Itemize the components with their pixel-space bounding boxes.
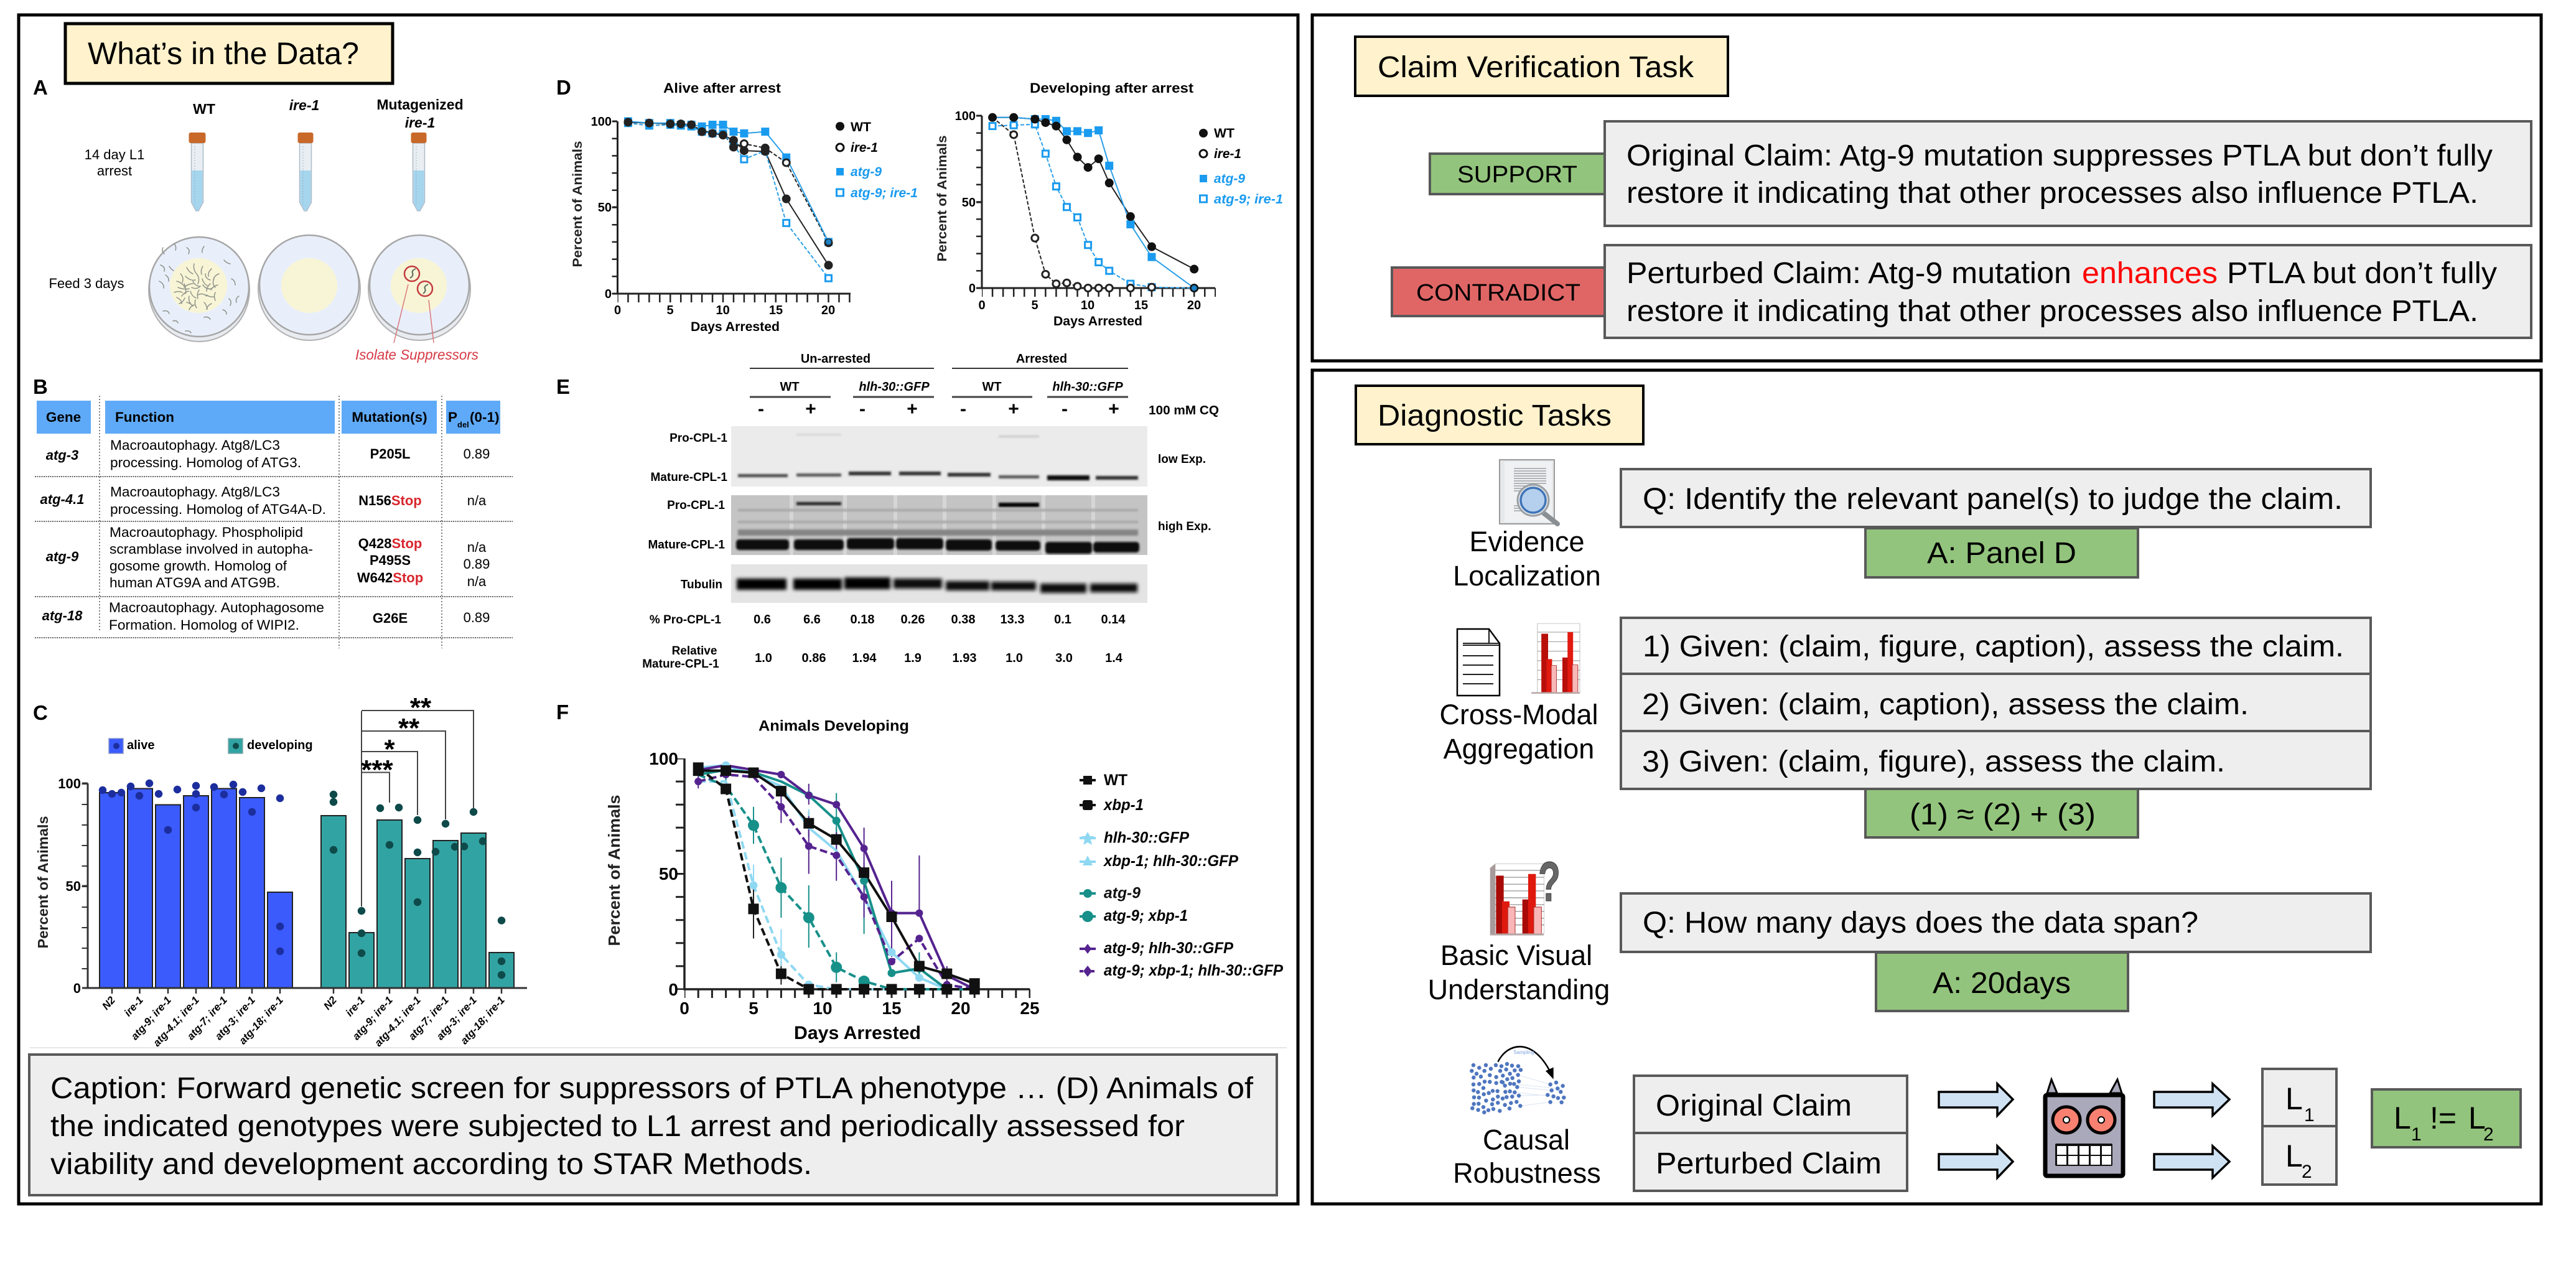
blot: tubulin (731, 564, 1147, 603)
blot labels: high Exp. (1158, 520, 1211, 533)
label boxes L1 L2: L (2285, 1139, 2303, 1173)
table rows (40, 437, 490, 633)
perturbed claim box: Perturbed Claim: Atg-9 mutation (1626, 257, 2071, 290)
answer: 20days: A: 20days (1933, 967, 2071, 1000)
axis labels: 5 (749, 999, 758, 1018)
panel B: gene table: B (33, 375, 48, 398)
blot labels: % Pro-CPL-1 (650, 613, 721, 627)
blot header: WT (780, 380, 800, 394)
claim pair boxes (1634, 1076, 1907, 1191)
icon: plate mutagenized with suppressors: Isolate Suppressors (355, 347, 478, 363)
panel E: western blot (556, 352, 1219, 671)
caption box: Caption: Forward genetic screen for suppressors of PTLA phenotype … (D) Animals of (50, 1072, 1254, 1105)
table rows: Macroautophagy. Atg8/LC3 (110, 437, 280, 453)
table rows: P495S (370, 552, 411, 568)
category labels: ire-1 (343, 994, 367, 1018)
blot values: 0.6 (754, 613, 771, 627)
blot values: 1.93 (953, 651, 976, 665)
panel A: screen schematic: Mutagenized (376, 96, 464, 113)
caption box (29, 1055, 1277, 1195)
significance brackets: ** (398, 713, 420, 743)
axis labels: 100 (649, 749, 678, 768)
list: three given prompts: 1) Given: (claim, figure, caption), assess the claim. (1643, 630, 2344, 663)
chart: alive after arrest: Days Arrested (691, 320, 780, 334)
panel C: bar chart: Percent of Animals (35, 816, 51, 948)
blot values: 13.3 (1001, 613, 1024, 627)
original claim box (1605, 121, 2531, 226)
chart: alive after arrest: 20 (821, 304, 835, 317)
table rows: Macroautophagy. Phospholipid (110, 524, 303, 540)
axes (82, 783, 527, 994)
label: CONTRADICT (1392, 268, 1605, 316)
table rows: Q428Stop (358, 536, 422, 551)
chart: alive after arrest: 5 (666, 304, 674, 317)
blot values: 0.18 (851, 613, 874, 627)
icon: plate ire-1 (258, 235, 360, 340)
icon: sampled graph (1472, 1046, 1564, 1112)
list: three given prompts (1621, 618, 2371, 789)
answer: equation (1865, 789, 2138, 837)
blot labels: Mature-CPL-1 (650, 471, 727, 484)
perturbed claim box: enhances (2082, 257, 2218, 290)
axis labels (649, 749, 1040, 1018)
caption box: viability and development according to STAR Methods. (50, 1148, 812, 1181)
error bars (698, 763, 947, 985)
blot labels: low Exp. (1158, 453, 1206, 466)
category labels: atg-3; ire-1 (434, 994, 479, 1042)
legend: WT (851, 120, 871, 134)
category labels: N2 (321, 994, 339, 1012)
icon: robot (2045, 1079, 2123, 1176)
blot values: 1.4 (1105, 651, 1123, 665)
panel C: bar chart: 50 (66, 879, 81, 894)
table rows: n/a (467, 574, 487, 589)
series lines (698, 765, 974, 989)
task: basic visual understanding (1428, 851, 1610, 1005)
axis labels: 10 (813, 999, 833, 1018)
blot header: hlh-30::GFP (859, 380, 930, 394)
chart: developing after arrest: Days Arrested (1053, 314, 1142, 329)
panel F: animals developing line chart: Animals Developing (758, 718, 909, 734)
claim pair boxes: Original Claim (1656, 1089, 1852, 1122)
legend (836, 120, 918, 200)
table rows: human ATG9A and ATG9B. (110, 575, 280, 590)
arrow: original to model (1939, 1084, 2013, 1116)
chart: developing after arrest: 0 (969, 282, 976, 296)
heading: Diagnostic Tasks (1356, 386, 1643, 444)
question: identify relevant panels: Q: Identify the relevant panel(s) to judge the claim. (1643, 483, 2343, 516)
chart: developing after arrest: 100 (955, 110, 976, 123)
blot header: + (1108, 399, 1119, 419)
panel: claim verification task (1312, 15, 2541, 361)
panel F: animals developing line chart: Percent of Animals (605, 795, 623, 946)
table rows: Macroautophagy. Atg8/LC3 (110, 484, 280, 500)
icon: sampled graph: Sampling (1513, 1050, 1534, 1055)
axis labels: 0 (679, 999, 689, 1018)
task: evidence localization (1453, 460, 1601, 592)
category labels: ire-1 (122, 994, 146, 1018)
table rows: P205L (370, 446, 410, 462)
table header: Function (115, 409, 174, 425)
arrow: model to L1 (2154, 1084, 2229, 1116)
legend (1080, 771, 1283, 979)
task: basic visual understanding: Basic Visual (1440, 939, 1592, 971)
table header: P (448, 409, 457, 425)
blot labels: Relative (672, 645, 717, 658)
blot values: 0.86 (802, 651, 826, 665)
blot labels: Pro-CPL-1 (670, 432, 727, 445)
table rows: n/a (467, 539, 487, 555)
legend: developing (247, 739, 313, 752)
panel A: screen schematic: ire-1 (289, 97, 319, 113)
question: days span (1621, 893, 2371, 952)
chart: developing after arrest: 10 (1081, 299, 1094, 312)
table header (37, 401, 500, 434)
legend: xbp-1 (1103, 796, 1144, 814)
blot: high exposure (731, 495, 1147, 555)
blot header: - (758, 399, 764, 419)
icon: document (1457, 629, 1500, 696)
blot header: + (805, 399, 816, 419)
chart: developing after arrest: 5 (1031, 299, 1038, 312)
result: L1 != L2 (2372, 1089, 2521, 1147)
panel A: screen schematic: Feed 3 days (49, 276, 124, 291)
blot values: 0.14 (1101, 613, 1126, 627)
original claim box: Original Claim: Atg-9 mutation suppresses PTLA but don’t fully (1626, 139, 2493, 172)
significance brackets (361, 692, 474, 906)
question: days span: Q: How many days does the data span? (1643, 906, 2198, 939)
significance brackets: * (384, 734, 395, 765)
heading: Claim Verification Task: Claim Verification Task (1378, 51, 1694, 84)
chart: alive after arrest: Percent of Animals (571, 141, 585, 268)
axis labels: 50 (659, 864, 678, 883)
blot labels: Mature-CPL-1 (642, 658, 719, 671)
axis labels: 0 (668, 980, 678, 999)
legend: atg-9 (1104, 885, 1141, 902)
blot: low exposure (731, 426, 1147, 487)
blot values: 3.0 (1055, 651, 1073, 665)
table rows: N156Stop (358, 493, 422, 508)
panel A: screen schematic: 14 day L1 (85, 147, 144, 162)
blot values: 0.38 (951, 613, 975, 627)
panel A: screen schematic: ire-1 (405, 114, 435, 131)
panel F: animals developing line chart: F (556, 701, 569, 724)
legend: WT (1104, 771, 1127, 789)
category labels: atg-18; ire-1 (458, 994, 507, 1046)
icon: tube ire-1 (297, 133, 314, 211)
panel A: screen schematic: WT (193, 101, 215, 117)
legend (1199, 126, 1283, 207)
heading: What's in the Data? (65, 24, 393, 83)
table rows: scramblase involved in autopha- (110, 541, 313, 557)
list: three given prompts: 3) Given: (claim, figure), assess the claim. (1642, 745, 2225, 778)
blot header: 100 mM CQ (1149, 404, 1219, 417)
chart: developing after arrest (935, 80, 1283, 329)
arrow: model to L2 (2154, 1146, 2229, 1178)
task: basic visual understanding: Understanding (1428, 974, 1610, 1005)
task: evidence localization: Localization (1453, 560, 1601, 592)
icon: red bar chart (1531, 623, 1580, 694)
legend: alive (127, 739, 154, 752)
answer: equation: (1) ≈ (2) + (3) (1910, 798, 2096, 831)
result: L1 != L2: L (2394, 1101, 2411, 1135)
chart: developing after arrest: 15 (1134, 299, 1148, 312)
legend: ire-1 (1214, 147, 1241, 161)
icon: plate mutagenized with suppressors (355, 235, 478, 363)
chart: alive after arrest: Alive after arrest (663, 80, 782, 96)
icon: bar chart with question mark (1490, 864, 1544, 935)
blot labels (642, 432, 1211, 671)
category labels: atg-3; ire-1 (213, 994, 258, 1042)
blot header: + (907, 399, 918, 419)
panel: diagnostic tasks (1312, 370, 2541, 1204)
chart: developing after arrest: Percent of Animals (935, 136, 950, 261)
task: evidence localization: Evidence (1469, 526, 1585, 557)
table rows: n/a (467, 493, 487, 508)
category labels: atg-4.1; ire-1 (372, 994, 423, 1049)
task: causal robustness (1453, 1046, 1601, 1189)
category labels: atg-4.1; ire-1 (151, 994, 202, 1049)
icon: question mark: ? (1538, 851, 1561, 913)
panel C: bar chart (33, 692, 527, 1049)
blot values: 1.0 (1006, 651, 1023, 665)
result: L1 != L2: 2 (2483, 1124, 2494, 1145)
perturbed claim box: restore it indicating that other processes also influence PTLA. (1626, 295, 2478, 328)
category labels: atg-7; ire-1 (406, 994, 451, 1042)
blot values: 1.0 (755, 651, 772, 665)
axis labels: 25 (1020, 999, 1040, 1018)
panel B: gene table (33, 375, 513, 648)
panel C: bar chart: C (33, 701, 48, 724)
blot header: hlh-30::GFP (1052, 380, 1123, 394)
significance brackets: *** (361, 755, 394, 785)
blot header: - (1062, 399, 1068, 419)
table header: (0-1) (470, 409, 500, 425)
claim pair boxes: Perturbed Claim (1656, 1147, 1882, 1180)
category labels: atg-18; ire-1 (236, 994, 286, 1046)
label boxes L1 L2: 2 (2302, 1162, 2312, 1182)
table rows: atg-9 (46, 549, 79, 564)
legend: atg-9; ire-1 (851, 186, 918, 200)
panel E: western blot: E (556, 375, 570, 398)
chart: alive after arrest: 15 (769, 304, 783, 317)
label boxes L1 L2 (2262, 1069, 2336, 1185)
legend: atg-9; xbp-1 (1104, 907, 1188, 925)
table rows: Formation. Homolog of WIPI2. (109, 617, 299, 633)
category labels: atg-9; ire-1 (129, 994, 174, 1042)
category labels (100, 994, 507, 1049)
table rows: atg-4.1 (40, 492, 84, 507)
category labels: N2 (100, 994, 118, 1012)
panel A: screen schematic: arrest (97, 163, 132, 179)
table header: Gene (46, 409, 81, 425)
chart: developing after arrest: Developing after arrest (1030, 80, 1194, 96)
heading: Diagnostic Tasks: Diagnostic Tasks (1378, 399, 1612, 432)
table rows: 0.89 (464, 610, 490, 625)
perturbed claim box (1605, 245, 2531, 338)
heading: Claim Verification Task (1355, 37, 1728, 96)
label: SUPPORT (1430, 154, 1605, 194)
legend: WT (1214, 126, 1234, 141)
icon: plate WT with worms (149, 237, 250, 342)
table rows: gosome growth. Homolog of (110, 558, 287, 574)
chart: alive after arrest (571, 80, 918, 334)
panel D: survival line charts (556, 76, 1283, 334)
legend: atg-9 (851, 165, 882, 179)
chart: alive after arrest: 100 (591, 115, 612, 129)
blot header: - (960, 399, 966, 419)
chart: alive after arrest: 0 (614, 304, 621, 317)
task: causal robustness: Robustness (1453, 1157, 1601, 1189)
result: L1 != L2: 1 (2411, 1124, 2422, 1145)
panel D: survival line charts: D (556, 76, 571, 99)
heading: What's in the Data?: What’s in the Data? (88, 36, 359, 71)
axis labels: 15 (882, 999, 902, 1018)
legend: atg-9; hlh-30::GFP (1104, 939, 1233, 957)
legend: atg-9; xbp-1; hlh-30::GFP (1104, 962, 1283, 979)
blot header: - (859, 399, 866, 419)
blot header: Un-arrested (801, 352, 870, 366)
chart: alive after arrest: 0 (605, 287, 612, 301)
blot values: 1.94 (852, 651, 877, 665)
blot labels: Tubulin (681, 579, 722, 591)
result: L1 != L2: L (2468, 1101, 2486, 1135)
blot header (750, 352, 1219, 419)
blot header: Arrested (1016, 352, 1067, 366)
perturbed claim box: PTLA but don’t fully (2227, 257, 2497, 290)
question: identify relevant panels (1621, 469, 2371, 527)
legend: xbp-1; hlh-30::GFP (1103, 852, 1238, 870)
table rows: 0.89 (464, 556, 490, 572)
blot header: WT (982, 380, 1002, 394)
panel C: bar chart: 100 (58, 776, 81, 791)
legend: atg-9 (1214, 172, 1245, 186)
blot labels: Mature-CPL-1 (648, 539, 725, 551)
blot values: 1.9 (904, 651, 922, 665)
task: cross-modal aggregation: Aggregation (1444, 733, 1594, 765)
legend: ire-1 (851, 141, 878, 155)
task: cross-modal aggregation (1439, 623, 1598, 765)
table rows: atg-3 (46, 447, 78, 463)
legend: hlh-30::GFP (1104, 829, 1189, 846)
icon: document with magnifier (1500, 460, 1557, 524)
panel A: screen schematic: A (33, 76, 48, 99)
table rows: Macroautophagy. Autophagosome (109, 600, 324, 615)
task: causal robustness: Causal (1483, 1124, 1570, 1156)
blot values: 6.6 (803, 613, 821, 627)
table rows: atg-18 (42, 608, 83, 623)
result: L1 != L2: != (2430, 1101, 2457, 1135)
label boxes L1 L2: 1 (2304, 1105, 2315, 1126)
original claim box: restore it indicating that other processes also influence PTLA. (1626, 177, 2478, 210)
category labels: atg-7; ire-1 (185, 994, 230, 1042)
axis labels: 20 (951, 999, 971, 1018)
answer: Panel D: A: Panel D (1927, 537, 2076, 570)
panel C: bar chart: 0 (73, 981, 81, 996)
table header: Mutation(s) (352, 409, 427, 425)
legend: atg-9; ire-1 (1214, 192, 1283, 207)
table rows: G26E (373, 610, 408, 626)
blot header: + (1008, 399, 1019, 419)
blot values: 0.26 (901, 613, 925, 627)
panel F: animals developing line chart (556, 701, 1283, 1043)
arrow: perturbed to model (1939, 1146, 2013, 1178)
blot values: 0.1 (1054, 613, 1071, 627)
answer: 20days (1876, 953, 2128, 1011)
table rows: processing. Homolog of ATG4A-D. (110, 501, 326, 517)
table rows: processing. Homolog of ATG3. (110, 455, 301, 470)
answer: Panel D (1865, 528, 2138, 577)
bars (100, 789, 514, 988)
icon: tube mutagenized (411, 133, 427, 211)
panel: what's in the data (19, 15, 1298, 1204)
chart: developing after arrest: 20 (1187, 299, 1201, 312)
blot labels: Pro-CPL-1 (667, 499, 725, 512)
legend (109, 739, 313, 753)
label: CONTRADICT: CONTRADICT (1416, 280, 1580, 306)
chart: alive after arrest: 10 (716, 304, 730, 317)
chart: developing after arrest: 50 (962, 196, 976, 210)
table rows: 0.89 (464, 446, 490, 462)
icon: tube WT (189, 133, 205, 211)
table header: del (457, 420, 469, 429)
panel F: animals developing line chart: Days Arrested (794, 1023, 921, 1043)
significance brackets: ** (410, 692, 432, 723)
chart: developing after arrest: 0 (978, 299, 986, 312)
label: SUPPORT: SUPPORT (1457, 162, 1577, 188)
caption box: the indicated genotypes were subjected to L1 arrest and periodically assessed for (50, 1110, 1185, 1143)
list: three given prompts: 2) Given: (claim, caption), assess the claim. (1642, 688, 2249, 721)
chart: alive after arrest: 50 (598, 201, 612, 215)
panel A: screen schematic (33, 76, 478, 363)
category labels: atg-9; ire-1 (350, 994, 395, 1042)
label boxes L1 L2: L (2285, 1081, 2303, 1116)
table rows: W642Stop (357, 570, 423, 585)
blot values (754, 613, 1126, 665)
task: cross-modal aggregation: Cross-Modal (1439, 699, 1598, 730)
